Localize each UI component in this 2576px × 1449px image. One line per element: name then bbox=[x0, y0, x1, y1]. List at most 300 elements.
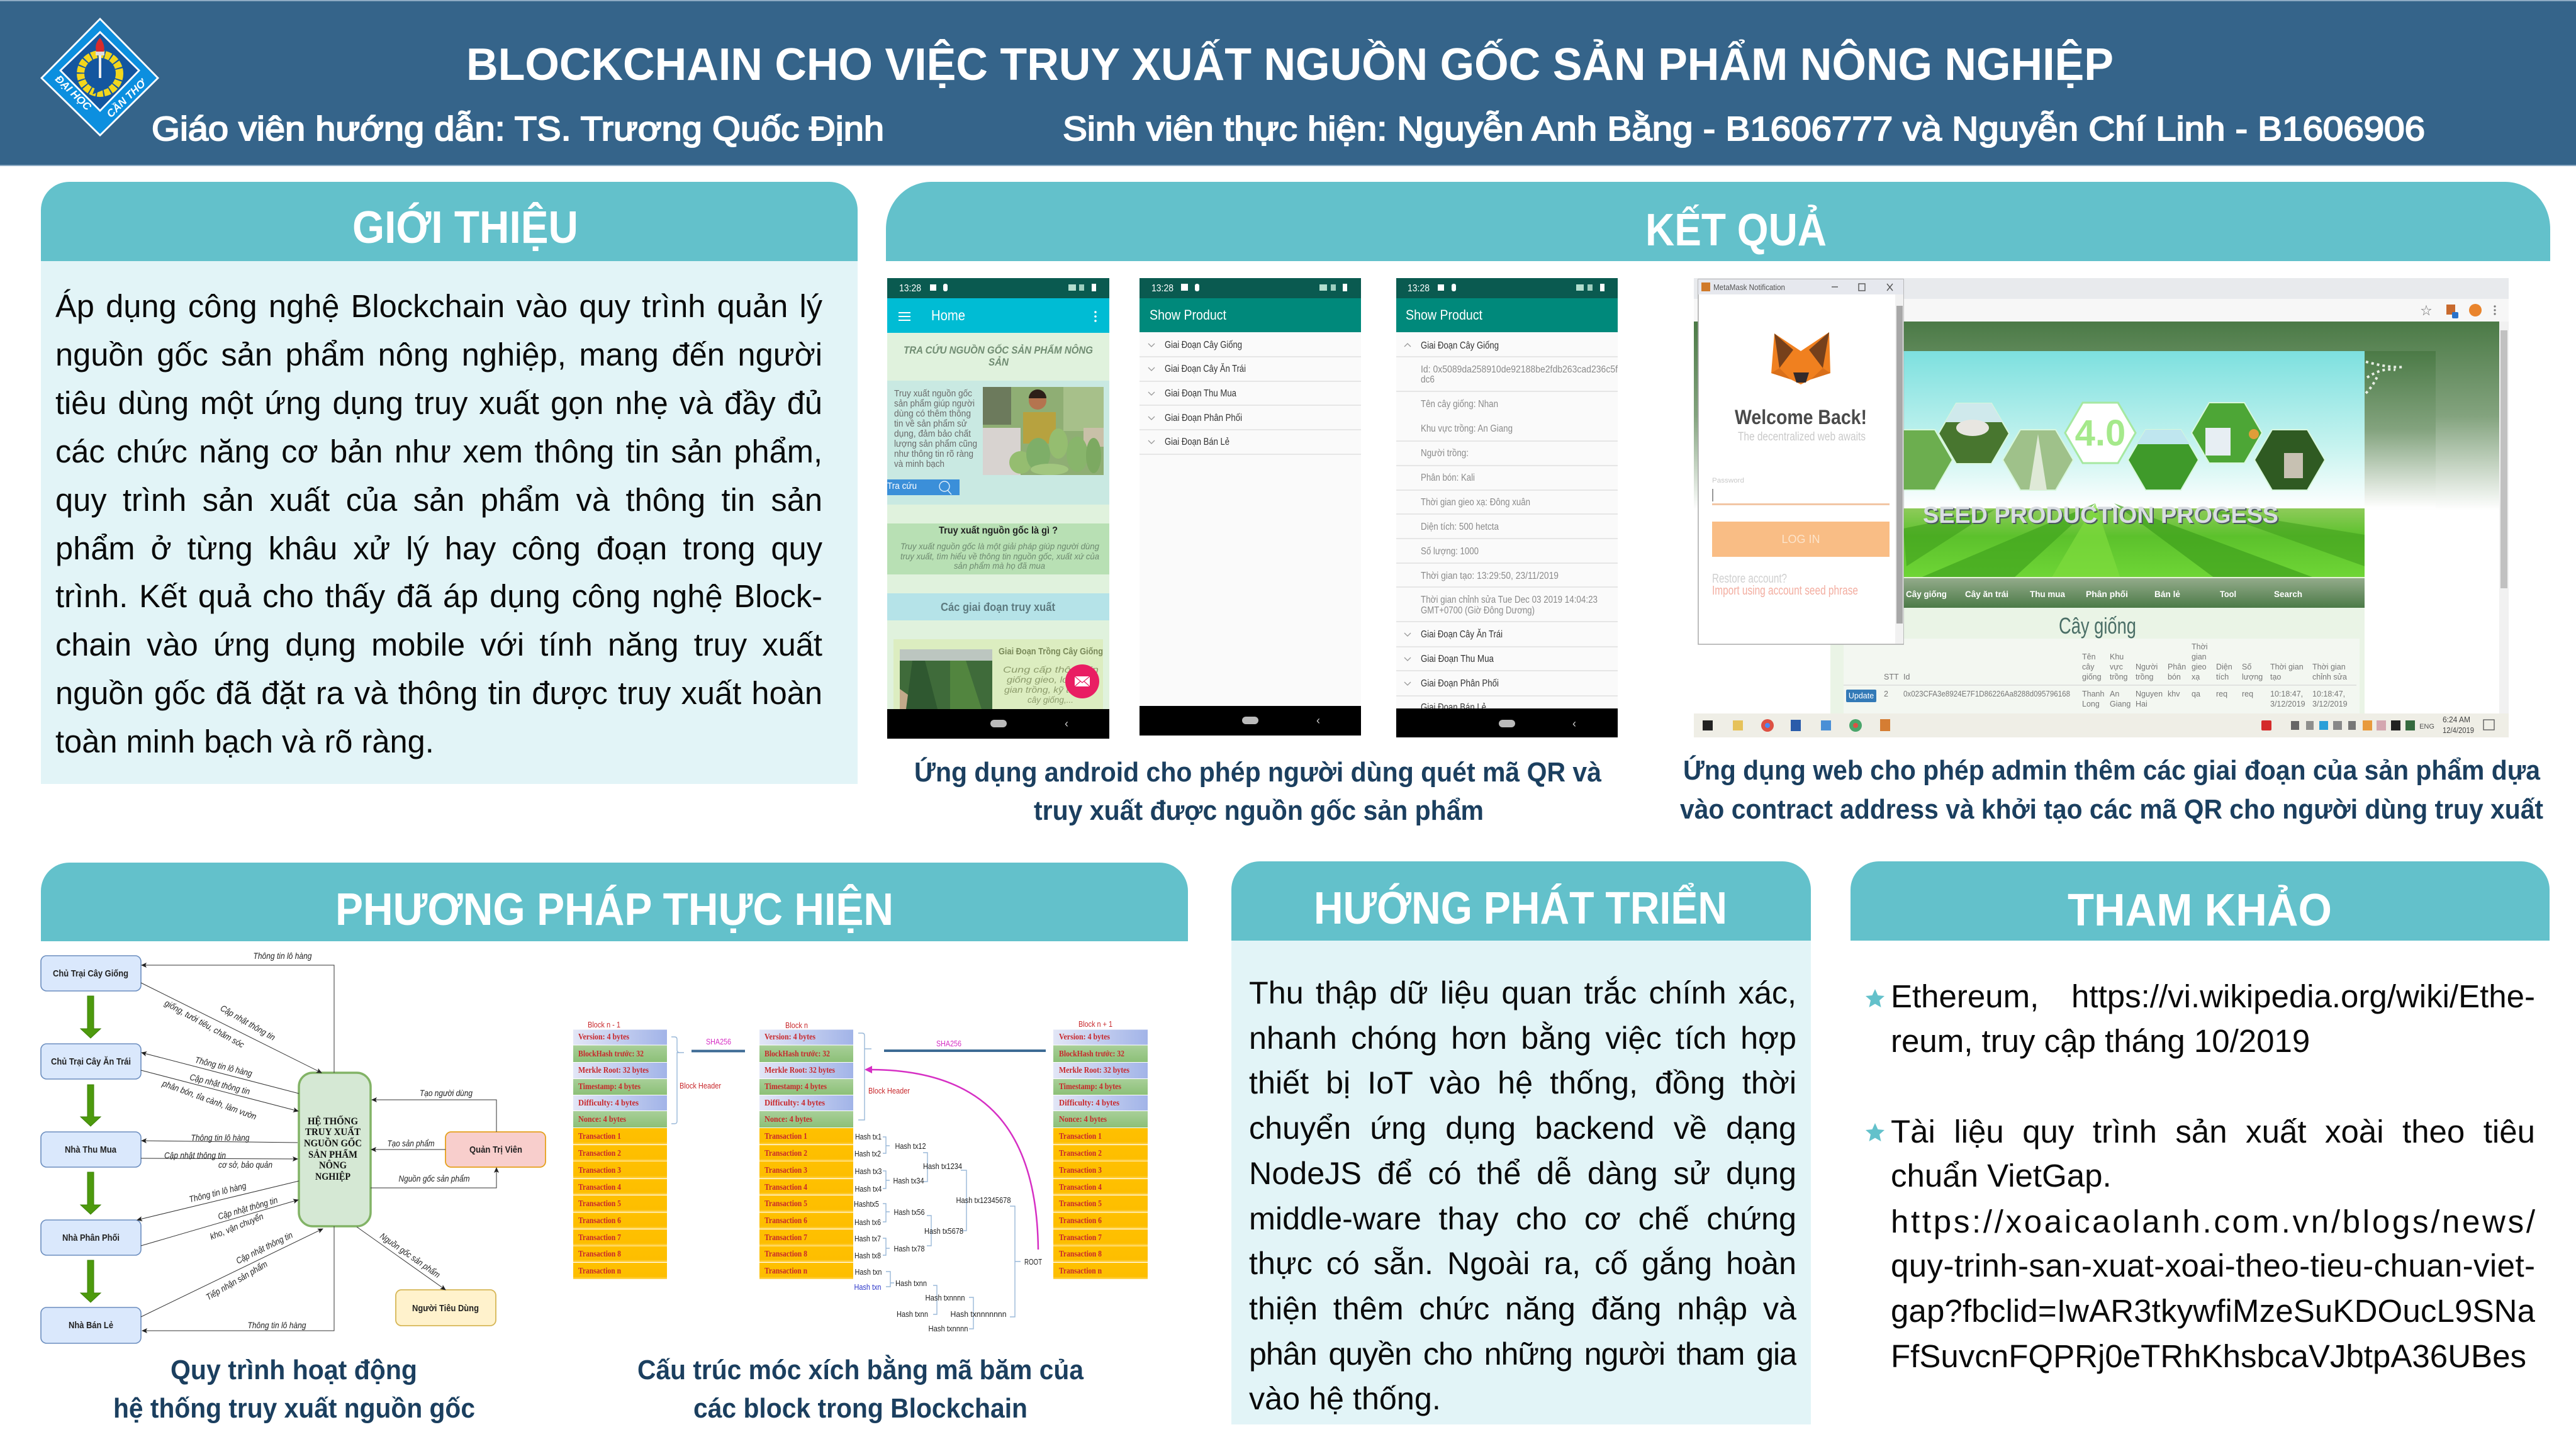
arrow labels: Thông tin lô hàng bbox=[191, 1133, 250, 1143]
block n-1 column: Transaction 5 bbox=[578, 1199, 621, 1209]
block n+1 column bbox=[1053, 1019, 1148, 1279]
screenshot: android product list: Giai Đoạn Thu Mua bbox=[1165, 388, 1236, 399]
screenshot: android product list: Show Product bbox=[1150, 307, 1226, 323]
block n column: Block n bbox=[785, 1021, 808, 1030]
merkle tree: Hash txn bbox=[854, 1283, 882, 1292]
block n column: Nonce: 4 bytes bbox=[764, 1115, 812, 1124]
future work text: vào hệ thống. bbox=[1249, 1380, 1441, 1416]
block n column: Transaction 1 bbox=[764, 1132, 807, 1141]
block n+1 column: Transaction 3 bbox=[1059, 1166, 1102, 1175]
web product table: lượng bbox=[2242, 673, 2263, 681]
block n column: Transaction 2 bbox=[764, 1149, 807, 1158]
introduction text: trình. Kết quả cho thấy đã áp dụng công nghệ Block- bbox=[55, 578, 822, 614]
screenshot: android product detail: ‹ bbox=[1572, 717, 1576, 730]
system box: TRUY XUẤT bbox=[305, 1126, 361, 1138]
block n-1 column: Block n - 1 bbox=[588, 1020, 620, 1029]
web product table bbox=[1830, 608, 2365, 713]
web product table: req bbox=[2216, 690, 2227, 698]
block n column bbox=[759, 1021, 853, 1279]
introduction heading bbox=[41, 182, 858, 261]
screenshot: android product detail: Tên cây giống: Nhan bbox=[1421, 399, 1498, 410]
web product table: Phân bbox=[2168, 663, 2186, 671]
block n+1 column: Transaction 4 bbox=[1059, 1183, 1102, 1192]
admin box bbox=[445, 1132, 546, 1167]
block n column: Transaction 3 bbox=[764, 1166, 807, 1175]
web product table: 0x023CFA3e8924E7F1D86226Aa8288d095796168 bbox=[1903, 690, 2070, 698]
title: BLOCKCHAIN CHO VIỆC TRUY XUẤT NGUỒN GỐC SẢN PHẨM NÔNG NGHIỆP bbox=[466, 38, 2114, 90]
arrow labels: Tạo sản phẩm bbox=[388, 1138, 435, 1148]
header braces and SHA256 arrows: SHA256 bbox=[936, 1039, 961, 1048]
screenshot: android home: giống gieo, loại bbox=[1007, 674, 1077, 685]
web product table: cây bbox=[2082, 663, 2095, 671]
screenshot: android home: Tra cứu bbox=[887, 481, 917, 491]
block n+1 column: Transaction 8 bbox=[1059, 1250, 1102, 1259]
screenshot: android home: Truy xuất nguồn gốc là một giải pháp giúp người dùng bbox=[900, 541, 1099, 551]
web product table: Long bbox=[2082, 700, 2100, 708]
screenshot: android home: Giai Đoạn Trồng Cây Giống bbox=[999, 646, 1103, 657]
screenshot: android home: Truy xuất nguồn gốc bbox=[894, 389, 972, 399]
panel: future work bbox=[1231, 861, 1811, 1424]
logo: Can Tho University: CẦN THƠ bbox=[104, 76, 149, 120]
photo: seedling nursery bbox=[900, 649, 992, 709]
screenshot: android home: Các giai đoạn truy xuất bbox=[941, 601, 1055, 613]
references heading bbox=[1851, 861, 2550, 941]
MetaMask login popup: Import using account seed phrase bbox=[1712, 584, 1858, 598]
web product table: 10:18:47, bbox=[2270, 690, 2303, 698]
block n+1 column: Transaction 1 bbox=[1059, 1132, 1102, 1141]
windows taskbar: 6:24 AM bbox=[2443, 715, 2470, 724]
block n-1 column: Transaction n bbox=[578, 1267, 621, 1276]
arrow labels: giống, tưới tiêu, chăm sóc bbox=[163, 998, 246, 1049]
web product table: Diện bbox=[2216, 663, 2232, 671]
screenshot: android home: lượng sản phẩm cũng bbox=[894, 439, 977, 449]
block n+1 column: Merkle Root: 32 bytes bbox=[1059, 1066, 1129, 1075]
screenshot: android home: truy xuất, tìm hiểu về thông tin nguồn gốc, xuất xứ của bbox=[900, 551, 1099, 561]
panel: methods bbox=[41, 863, 1188, 1424]
flow diagram: traceability system bbox=[41, 951, 546, 1343]
block n+1 column: Block n + 1 bbox=[1078, 1019, 1112, 1029]
web product table: khv bbox=[2168, 690, 2180, 698]
icon: star bullet bbox=[1866, 1123, 1884, 1141]
block n+1 column: Transaction 7 bbox=[1059, 1233, 1102, 1243]
arrow labels: Nguồn gốc sản phẩm bbox=[399, 1173, 470, 1183]
screenshot: android product list: 13:28 bbox=[1151, 283, 1173, 294]
consumer box bbox=[396, 1290, 496, 1326]
block n column: Merkle Root: 32 bytes bbox=[764, 1066, 835, 1075]
web product table: An bbox=[2110, 690, 2119, 698]
merkle tree: Hash txnnnn bbox=[925, 1294, 965, 1302]
admin box: Quản Trị Viên bbox=[469, 1144, 522, 1155]
arrow labels: Cập nhật thông tin bbox=[164, 1150, 226, 1160]
arrow labels: Thông tin lô hàng bbox=[194, 1055, 254, 1078]
block n+1 column: Nonce: 4 bytes bbox=[1059, 1115, 1107, 1124]
block n-1 column: Nonce: 4 bytes bbox=[578, 1115, 626, 1124]
screenshot: android product list: Giai Đoạn Phân Phối bbox=[1165, 413, 1242, 423]
screenshot: android product detail: Thời gian chỉnh sửa Tue Dec 03 2019 14:04:23 bbox=[1421, 595, 1598, 605]
block n+1 column: Transaction 2 bbox=[1059, 1149, 1102, 1158]
system box: SẢN PHẨM bbox=[308, 1148, 357, 1160]
system box: NGUỒN GỐC bbox=[304, 1136, 362, 1149]
web nav strip: Search bbox=[2274, 589, 2302, 599]
arrow labels: Thông tin lô hàng bbox=[188, 1180, 247, 1204]
future work text: chuyển ứng dụng backend về dạng bbox=[1249, 1110, 1796, 1146]
web product table: req bbox=[2242, 690, 2253, 698]
screenshot: android product detail: Thời gian tạo: 13:29:50, 23/11/2019 bbox=[1421, 571, 1559, 581]
screenshot: web admin with MetaMask: ☆ bbox=[2421, 305, 2432, 317]
MetaMask login popup: Password bbox=[1712, 477, 1744, 484]
system box bbox=[299, 1073, 371, 1226]
screenshot: android home: dùng có thêm thông bbox=[894, 409, 971, 419]
introduction text: chain vào ứng dụng mobile với tính năng truy xuất bbox=[55, 627, 822, 663]
caption: flow diagram: hệ thống truy xuất nguồn gốc bbox=[113, 1393, 475, 1424]
merkle tree: Hash tx12 bbox=[895, 1142, 926, 1151]
screenshot: android home: 13:28 bbox=[899, 283, 921, 294]
caption: chain diagram: các block trong Blockchain bbox=[693, 1393, 1028, 1424]
web product table: trồng bbox=[2110, 673, 2128, 681]
screenshot: android home: ‹ bbox=[1065, 717, 1068, 730]
web product table: Giang bbox=[2110, 700, 2131, 708]
header braces and SHA256 arrows: SHA256 bbox=[706, 1037, 731, 1046]
block n-1 column: Timestamp: 4 bytes bbox=[578, 1082, 641, 1092]
block n column: Transaction 8 bbox=[764, 1250, 807, 1259]
block n+1 column: Transaction n bbox=[1059, 1267, 1102, 1276]
merkle tree: Hash tx6 bbox=[854, 1218, 881, 1227]
screenshot: android home: cây giống,... bbox=[1028, 695, 1073, 705]
merkle tree: Hash txnn bbox=[895, 1279, 927, 1288]
screenshot: android home: TRA CỨU NGUỒN GỐC SẢN PHẨM NÔNG bbox=[904, 344, 1093, 356]
panel: references bbox=[1851, 861, 2550, 1374]
system box: NÔNG bbox=[319, 1159, 347, 1171]
web banner title: SEED PRODUCTION PROGESS bbox=[1923, 502, 2278, 528]
web product table: 3/12/2019 bbox=[2312, 700, 2348, 708]
block n+1 column: Difficulty: 4 bytes bbox=[1059, 1099, 1119, 1108]
future work heading: HƯỚNG PHÁT TRIỂN bbox=[1314, 883, 1727, 934]
actor labels: Chủ Trại Cây Ăn Trái bbox=[51, 1056, 131, 1067]
MetaMask login popup bbox=[1698, 279, 1903, 644]
actor labels: Nhà Phân Phối bbox=[62, 1233, 120, 1243]
web product table: chỉnh sửa bbox=[2312, 673, 2347, 681]
reference 2: https://xoaicaolanh.com.vn/blogs/news/ bbox=[1891, 1204, 2536, 1239]
arrow labels: Cập nhật thông tin bbox=[189, 1071, 251, 1097]
future work text bbox=[1249, 970, 1796, 1423]
block n column: Timestamp: 4 bytes bbox=[764, 1082, 827, 1092]
web product table: tích bbox=[2216, 673, 2229, 681]
web nav strip: Cây giống bbox=[1906, 589, 1947, 599]
web product table: Khu bbox=[2110, 652, 2124, 661]
merkle tree: Hash txnnnn bbox=[929, 1324, 968, 1333]
screenshot: android home bbox=[887, 278, 1109, 739]
web product table: qa bbox=[2192, 690, 2200, 698]
screenshot: android product detail: Thời gian gieo xạ: Đông xuân bbox=[1421, 497, 1530, 508]
arrow labels: phân bón, tỉa cành, làm vườn bbox=[160, 1078, 258, 1122]
block n column: BlockHash trước: 32 bbox=[764, 1049, 830, 1059]
web product table: bón bbox=[2168, 673, 2181, 681]
web nav strip: Thu mua bbox=[2030, 589, 2065, 599]
screenshot: android home: Cung cấp thông tin bbox=[1003, 664, 1099, 674]
introduction text: nguồn gốc sản phẩm nông nghiệp, mang đến người bbox=[55, 337, 822, 372]
arrow labels: cơ sở, bảo quản bbox=[218, 1160, 272, 1170]
introduction text: tiêu dùng một ứng dụng truy xuất gọn nhẹ và đầy đủ bbox=[55, 385, 822, 421]
web product table: Tên bbox=[2082, 652, 2096, 661]
introduction text: nguồn gốc đã đặt ra và thông tin được truy xuất hoàn bbox=[55, 675, 822, 711]
future work text: thiện thêm chức năng đăng nhập và bbox=[1249, 1290, 1796, 1326]
decorative green side panel bbox=[2365, 351, 2436, 508]
results heading bbox=[886, 182, 2550, 261]
screenshot: android product detail: dc6 bbox=[1421, 374, 1435, 385]
block n-1 column: Transaction 8 bbox=[578, 1250, 621, 1259]
students line: Sinh viên thực hiện: Nguyễn Anh Bằng - B1606777 và Nguyễn Chí Linh - B1606906 bbox=[1063, 110, 2425, 148]
web product table: Người bbox=[2136, 663, 2158, 671]
introduction text: các chức năng cơ bản như xem thông tin sản phẩm, bbox=[55, 434, 822, 469]
arrow labels: Nguồn gốc sản phẩm bbox=[378, 1231, 442, 1280]
reference 1: Ethereum, https://vi.wikipedia.org/wiki/Ethe- bbox=[1891, 978, 2535, 1014]
reference 2: gap?fbclid=IwAR3tkywfiMzeSuKDOucL9SNa bbox=[1891, 1293, 2536, 1329]
reference 1 bbox=[1891, 978, 2535, 1059]
screenshot: android home: SẢN bbox=[988, 356, 1009, 368]
web product table: Số bbox=[2242, 663, 2251, 671]
web nav strip: Cây ăn trái bbox=[1965, 589, 2008, 599]
reference 2: chuẩn VietGap. bbox=[1891, 1158, 2112, 1194]
caption: chain diagram: Cấu trúc móc xích bằng mã băm của bbox=[637, 1354, 1084, 1385]
merkle tree: Hash tx4 bbox=[854, 1185, 882, 1194]
methods heading: PHƯƠNG PHÁP THỰC HIỆN bbox=[335, 884, 893, 935]
introduction heading: GIỚI THIỆU bbox=[352, 202, 578, 253]
block n column: Transaction 6 bbox=[764, 1216, 807, 1226]
windows taskbar: ENG bbox=[2419, 723, 2434, 730]
screenshot: android product detail: 13:28 bbox=[1408, 283, 1430, 294]
arrow labels: Tiếp nhận sản phẩm bbox=[204, 1258, 269, 1302]
block n column: Difficulty: 4 bytes bbox=[764, 1099, 825, 1108]
header braces and SHA256 arrows: Block Header bbox=[868, 1086, 910, 1095]
MetaMask login popup: MetaMask Notification bbox=[1713, 283, 1785, 292]
reference 1: reum, truy cập tháng 10/2019 bbox=[1891, 1023, 2310, 1059]
logo: Can Tho University: ĐẠI HỌC bbox=[53, 73, 94, 113]
future work text: phân quyền cho những người tham gia bbox=[1249, 1336, 1796, 1372]
screenshot: android product list bbox=[1140, 278, 1361, 736]
header braces and SHA256 arrows bbox=[671, 1033, 1046, 1124]
web product table: vực bbox=[2110, 663, 2123, 671]
reference 2: quy-trinh-san-xuat-xoai-theo-tieu-chuan-viet- bbox=[1891, 1248, 2535, 1284]
merkle tree: Hash tx12345678 bbox=[956, 1196, 1011, 1205]
arrow labels: Cập nhật thông tin bbox=[216, 1195, 279, 1221]
header band bbox=[0, 0, 2576, 166]
MetaMask login popup: Restore account? bbox=[1712, 572, 1787, 586]
screenshot: android product detail: Show Product bbox=[1406, 307, 1482, 323]
web product table: gieo bbox=[2192, 663, 2207, 671]
future work heading bbox=[1231, 861, 1811, 941]
panel: results bbox=[886, 182, 2550, 826]
green sequence arrows bbox=[81, 996, 101, 1302]
screenshot: android product detail: Khu vực trồng: An Giang bbox=[1421, 423, 1513, 434]
caption: web app bbox=[1680, 754, 2543, 825]
arrow labels: Cập nhật thông tin bbox=[234, 1229, 294, 1266]
screenshot: android product list: Giai Đoạn Cây Ăn Trái bbox=[1165, 364, 1246, 374]
caption: chain diagram bbox=[637, 1354, 1084, 1424]
results heading: KẾT QUẢ bbox=[1645, 204, 1827, 255]
block n+1 column: Timestamp: 4 bytes bbox=[1059, 1082, 1121, 1092]
block n-1 column: Transaction 1 bbox=[578, 1132, 621, 1141]
merkle tree: ROOT bbox=[1024, 1258, 1042, 1267]
merkle tree: Hash txn bbox=[854, 1268, 882, 1277]
block n-1 column: Version: 4 bytes bbox=[578, 1032, 629, 1042]
screenshot: android product detail: Giai Đoạn Thu Mua bbox=[1421, 654, 1494, 664]
web product table: Hai bbox=[2136, 700, 2148, 708]
block n-1 column: Transaction 2 bbox=[578, 1149, 621, 1158]
arrow labels: Tạo người dùng bbox=[420, 1088, 473, 1098]
reference 2: FfSuvcnFQPRj0eTRhKhsbcaVJbtpA36UBes bbox=[1891, 1338, 2526, 1374]
block n-1 column: Difficulty: 4 bytes bbox=[578, 1099, 639, 1108]
MetaMask login popup: Welcome Back! bbox=[1735, 406, 1867, 428]
icon: MetaMask fox bbox=[1771, 332, 1830, 384]
introduction text bbox=[55, 283, 822, 773]
web product table: gian bbox=[2192, 652, 2207, 661]
screenshot: android product detail: Giai Đoạn Bán Lẻ bbox=[1421, 702, 1486, 713]
block n column: Transaction 5 bbox=[764, 1199, 807, 1209]
future work text: Thu thập dữ liệu quan trắc chính xác, bbox=[1249, 975, 1796, 1010]
caption: flow diagram bbox=[113, 1355, 475, 1424]
block n column: Transaction n bbox=[764, 1267, 807, 1276]
MetaMask login popup: LOG IN bbox=[1781, 533, 1820, 545]
hexagons: 4.0 bbox=[2075, 413, 2125, 454]
web product table: 3/12/2019 bbox=[2270, 700, 2305, 708]
web product table: trồng bbox=[2136, 673, 2154, 681]
screenshot: android product detail: Id: 0x5089da258910de92188be2fdb263cad236c5f bbox=[1421, 364, 1618, 375]
screenshot: android product list: Giai Đoạn Bán Lẻ bbox=[1165, 437, 1229, 447]
panel: introduction bbox=[41, 182, 858, 784]
block n+1 column: Version: 4 bytes bbox=[1059, 1032, 1110, 1042]
consumer box: Người Tiêu Dùng bbox=[412, 1303, 479, 1314]
web banner title: SEED PRODUCTION PROGESS bbox=[1924, 503, 2280, 529]
arrow labels: kho, vận chuyển bbox=[208, 1211, 265, 1241]
windows taskbar: 12/4/2019 bbox=[2443, 725, 2474, 735]
block n column: Transaction 7 bbox=[764, 1233, 807, 1243]
block n+1 column: Transaction 5 bbox=[1059, 1199, 1102, 1209]
merkle tree: Hash txnnnnnnn bbox=[950, 1310, 1007, 1319]
block n-1 column: BlockHash trước: 32 bbox=[578, 1049, 644, 1059]
screenshot: android product list: Giai Đoạn Cây Giống bbox=[1165, 340, 1242, 350]
block n+1 column: Transaction 6 bbox=[1059, 1216, 1102, 1226]
block n-1 column: Merkle Root: 32 bytes bbox=[578, 1066, 649, 1075]
reference 2: Tài liệu quy trình sản xuất xoài theo tiêu bbox=[1891, 1114, 2535, 1150]
merkle tree: Hash tx78 bbox=[893, 1245, 925, 1253]
icon: mail button bbox=[1065, 664, 1099, 698]
web product table: giống bbox=[2082, 673, 2102, 681]
screenshot: android product detail: Phân bón: Kali bbox=[1421, 473, 1475, 483]
caption: android app bbox=[914, 756, 1601, 826]
web nav strip bbox=[1903, 578, 2365, 608]
arrow labels: Cập nhật thông tin bbox=[219, 1003, 277, 1043]
actor labels: Nhà Thu Mua bbox=[65, 1144, 117, 1155]
web product table: tạo bbox=[2270, 673, 2281, 681]
actor labels bbox=[51, 968, 131, 1331]
web nav strip: Phân phối bbox=[2086, 589, 2128, 599]
future work text: nhanh chóng hơn bằng việc tích hợp bbox=[1249, 1020, 1796, 1056]
screenshot: android product detail: Giai Đoạn Cây Giống bbox=[1421, 340, 1499, 351]
block n-1 column: Transaction 4 bbox=[578, 1183, 621, 1192]
connection arrows bbox=[137, 965, 496, 1331]
merkle tree: Hash tx7 bbox=[854, 1234, 881, 1243]
screenshot: android product detail bbox=[1396, 278, 1618, 737]
web product table: Thời gian bbox=[2270, 663, 2304, 671]
block n-1 column: Transaction 6 bbox=[578, 1216, 621, 1226]
merkle tree: Hash tx3 bbox=[854, 1167, 882, 1176]
system box: NGHIỆP bbox=[315, 1171, 350, 1182]
actor labels: Chủ Trại Cây Giống bbox=[53, 968, 128, 979]
screenshot: android home: sản phẩm mà họ đã mua bbox=[954, 561, 1045, 571]
block n-1 column: Transaction 7 bbox=[578, 1233, 621, 1243]
merkle tree: Hash tx1 bbox=[855, 1133, 882, 1141]
merkle tree bbox=[854, 1133, 1042, 1333]
screenshot: android product detail: GMT+0700 (Giờ Đông Dương) bbox=[1421, 605, 1535, 616]
introduction text: toàn minh bạch và rõ ràng. bbox=[55, 724, 434, 759]
introduction text: quy trình sản xuất của sản phẩm và thông tin sản bbox=[55, 482, 822, 518]
web product table: STT bbox=[1884, 673, 1899, 681]
screenshot: web admin with MetaMask bbox=[1694, 278, 2509, 737]
future work text: thực có sẵn. Ngoài ra, cố gắng hoàn bbox=[1249, 1245, 1796, 1281]
screenshot: android product detail: Giai Đoạn Cây Ăn Trái bbox=[1421, 629, 1503, 640]
caption: android app: Ứng dụng android cho phép người dùng quét mã QR và bbox=[914, 756, 1601, 788]
block n+1 column: BlockHash trước: 32 bbox=[1059, 1049, 1124, 1059]
web nav strip: Tool bbox=[2220, 589, 2236, 599]
introduction text: Áp dụng công nghệ Blockchain vào quy trình quản lý bbox=[55, 288, 822, 324]
future work text: middle-ware thay cho cơ chế chứng bbox=[1249, 1200, 1796, 1236]
arrow labels: Thông tin lô hàng bbox=[248, 1320, 306, 1330]
hexagons bbox=[1882, 403, 2325, 490]
chain diagram: blockchain block structure bbox=[573, 1019, 1148, 1333]
logo: Can Tho University bbox=[40, 18, 159, 137]
merkle tree: Hash tx8 bbox=[854, 1251, 881, 1260]
web product table: 10:18:47, bbox=[2312, 690, 2345, 698]
future work text: NodeJS để có thể dễ dàng sử dụng bbox=[1249, 1155, 1796, 1191]
screenshot: android product detail: Số lượng: 1000 bbox=[1421, 546, 1479, 557]
merkle tree: Hash tx5678 bbox=[924, 1227, 963, 1236]
actor labels: Nhà Bán Lẻ bbox=[69, 1320, 113, 1331]
screenshot: android product list: ‹ bbox=[1316, 714, 1320, 727]
screenshot: android home: và minh bạch bbox=[894, 459, 944, 469]
screenshot: android home: tin về sản phẩm sử bbox=[894, 419, 967, 429]
merkle tree: Hash tx2 bbox=[854, 1150, 881, 1158]
block n-1 column bbox=[573, 1020, 667, 1279]
actor boxes bbox=[41, 956, 141, 1343]
caption: android app: truy xuất được nguồn gốc sản phẩm bbox=[1034, 795, 1484, 826]
web product table: Thanh bbox=[2082, 690, 2104, 698]
screenshot: android home: Home bbox=[931, 307, 965, 323]
block n column: Transaction 4 bbox=[764, 1183, 807, 1192]
merkle tree: Hash tx34 bbox=[893, 1177, 924, 1185]
web product table: Cây giống bbox=[2059, 613, 2136, 639]
system box: HỆ THỐNG bbox=[308, 1114, 359, 1127]
web product table: Id bbox=[1903, 673, 1910, 681]
screenshot: android home: Truy xuất nguồn gốc là gì ? bbox=[939, 525, 1058, 536]
magenta root arrow bbox=[865, 1066, 1038, 1250]
reference 2 bbox=[1891, 1114, 2536, 1374]
caption: flow diagram: Quy trình hoạt động bbox=[171, 1355, 417, 1385]
introduction text: phẩm ở từng khâu xử lý hay công đoạn trong quy bbox=[55, 530, 822, 566]
merkle tree: Hash tx1234 bbox=[923, 1162, 962, 1171]
future work text: thiết bị IoT vào hệ thống, đồng thời bbox=[1249, 1065, 1796, 1100]
screenshot: android home: sản phẩm giúp người bbox=[894, 399, 975, 409]
arrow labels: Thông tin lô hàng bbox=[253, 951, 312, 961]
block n column: Version: 4 bytes bbox=[764, 1032, 815, 1042]
web banner: seed production process bbox=[1882, 351, 2365, 579]
methods heading bbox=[41, 863, 1188, 941]
web product table: Thời bbox=[2192, 642, 2208, 651]
web product table: Nguyen bbox=[2136, 690, 2163, 698]
screenshot: android home: như thông tin rõ ràng bbox=[894, 449, 973, 459]
merkle tree: Hash txnn bbox=[897, 1310, 928, 1319]
windows taskbar bbox=[1694, 713, 2509, 737]
MetaMask login popup: The decentralized web awaits bbox=[1738, 430, 1866, 444]
